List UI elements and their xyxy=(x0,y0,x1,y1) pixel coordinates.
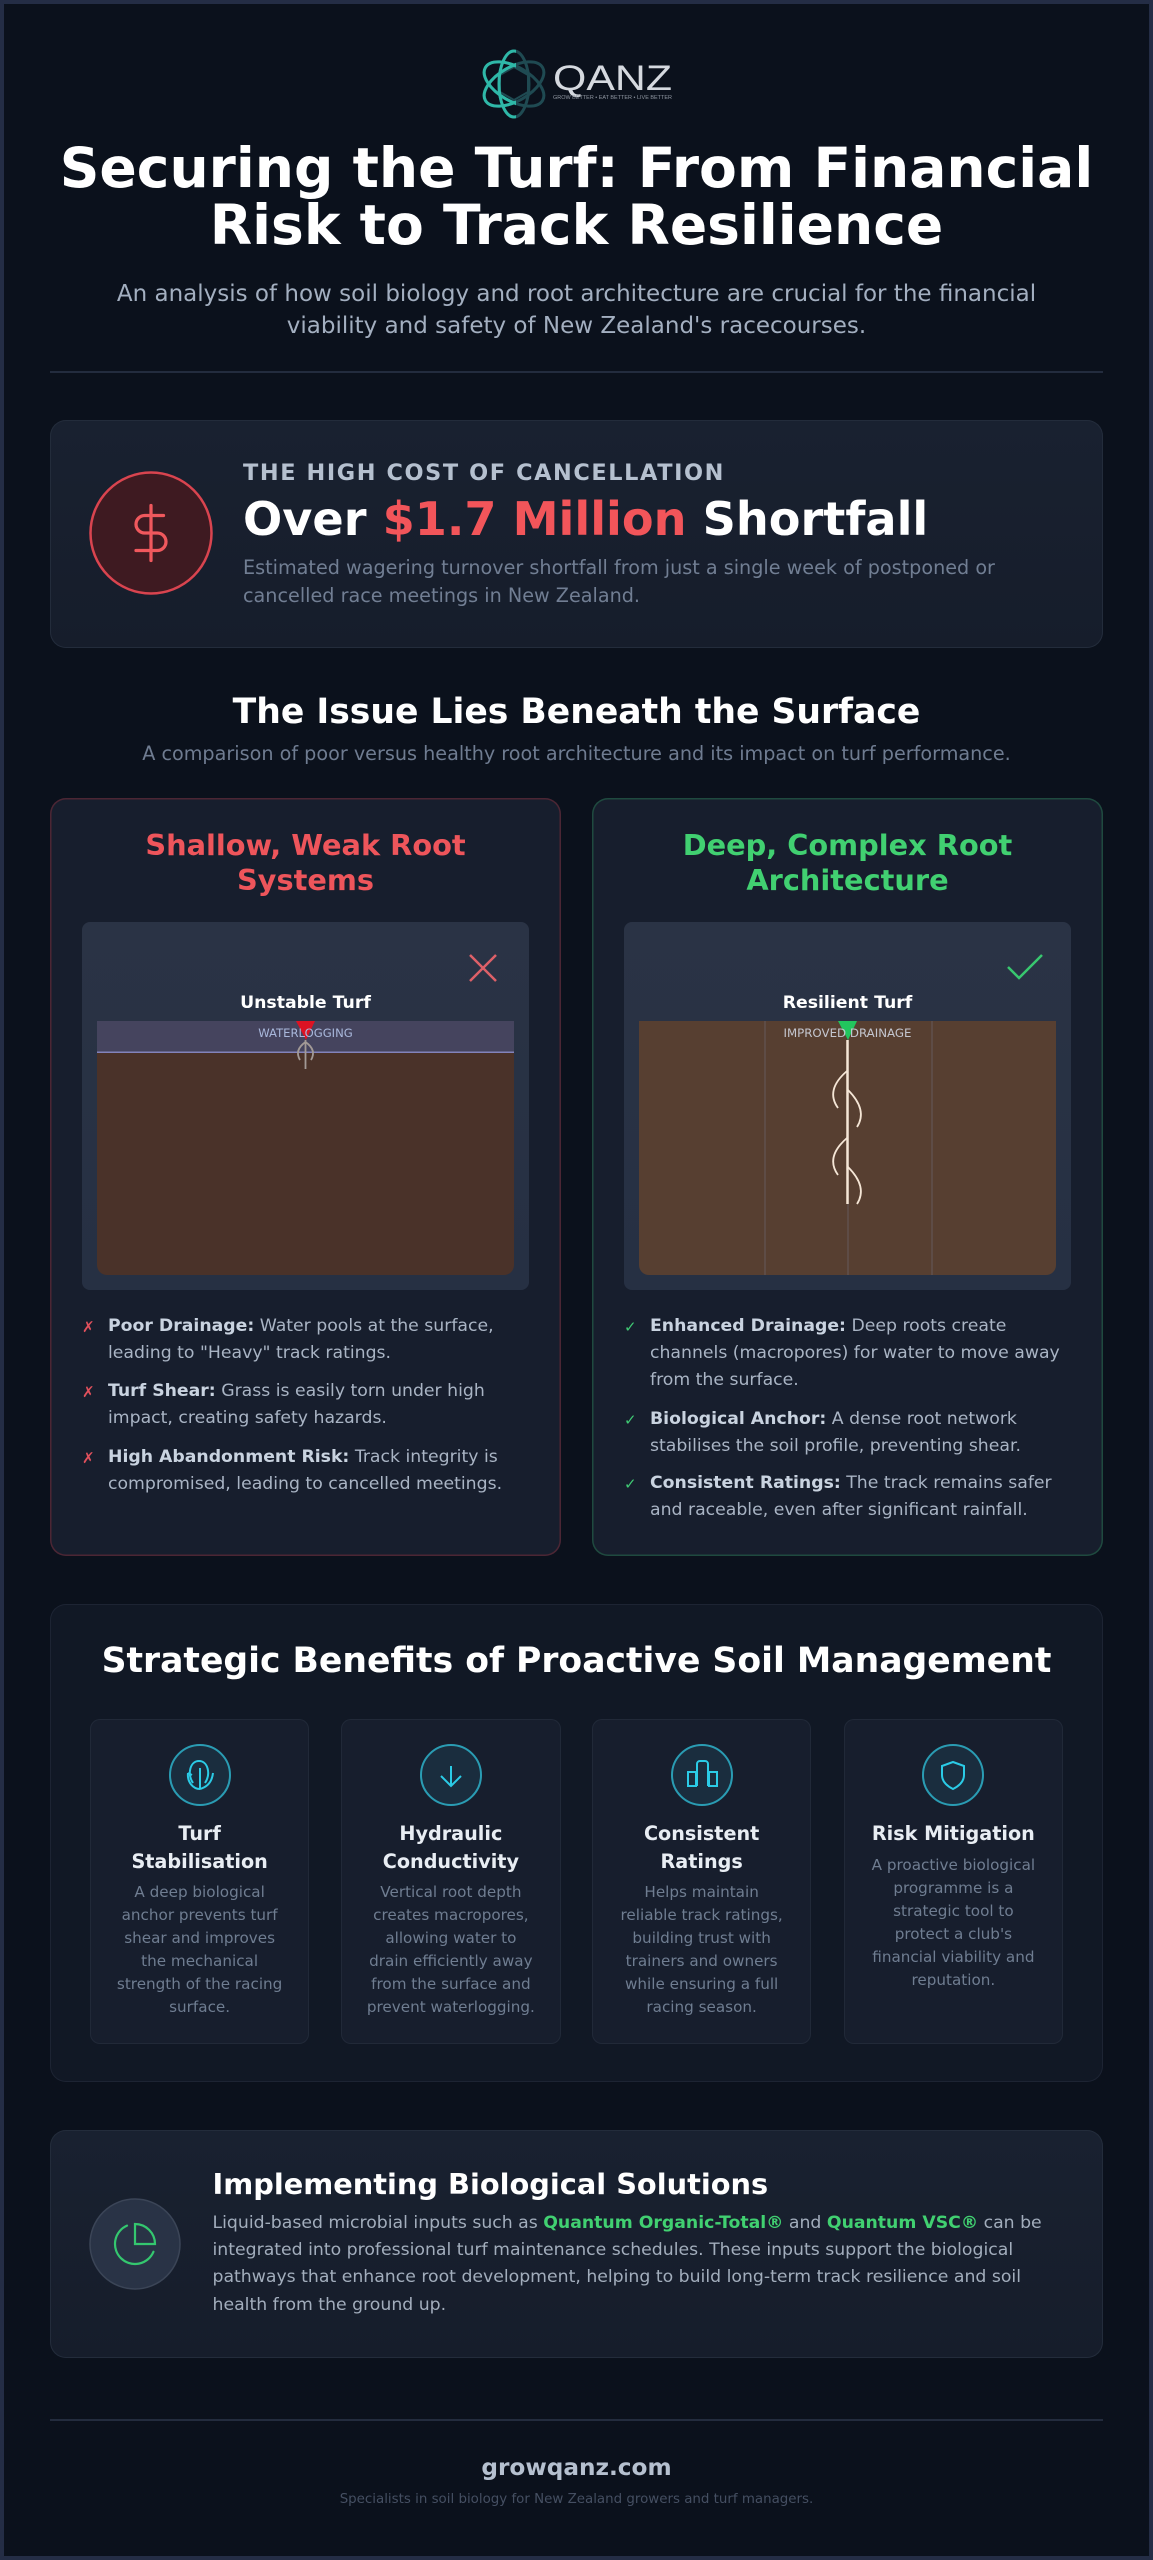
card: hydraulic conductivity xyxy=(341,1719,560,2044)
title xyxy=(60,136,1093,257)
card text: reliable track ratings, xyxy=(620,1906,783,1924)
card text: while ensuring a full xyxy=(625,1975,778,1993)
bullet: turf shear xyxy=(82,1381,485,1428)
card text: shear and improves xyxy=(124,1929,275,1947)
card text: A deep biological xyxy=(134,1883,265,1901)
bullet: abandonment risk: ✗ xyxy=(82,1449,95,1467)
card text: programme is a xyxy=(893,1879,1013,1897)
heading: Implementing Biological Solutions xyxy=(212,2167,768,2201)
card text: anchor prevents turf xyxy=(122,1906,278,1924)
card title: Conductivity xyxy=(383,1850,519,1873)
panel: deep roots xyxy=(592,798,1103,1556)
card text: the mechanical xyxy=(141,1952,258,1970)
card text xyxy=(620,1883,783,2016)
card title: Turf xyxy=(178,1822,221,1845)
card text: protect a club's xyxy=(895,1925,1012,1943)
heading: Architecture xyxy=(746,863,949,897)
panel: strategic benefits xyxy=(50,1604,1103,2082)
card text: creates macropores, xyxy=(373,1906,529,1924)
bullet: poor drainage xyxy=(82,1316,494,1363)
card text: building trust with xyxy=(632,1929,771,1947)
footer note: Specialists in soil biology for New Zealand growers and turf managers. xyxy=(340,2492,813,2507)
card text xyxy=(872,1856,1035,1989)
card text: drain efficiently away xyxy=(369,1952,533,1970)
icon: dollar xyxy=(89,471,213,595)
bullet: enhanced drainage: channels (macropores) for water to move away xyxy=(650,1343,1060,1363)
card text: from the surface and xyxy=(371,1975,531,1993)
card: consistent ratings xyxy=(592,1719,811,2044)
bullet: consistent ratings: ✓ xyxy=(624,1475,637,1493)
bullet: enhanced drainage: from the surface. xyxy=(650,1370,799,1390)
subtitle: viability and safety of New Zealand's racecourses. xyxy=(287,313,866,339)
logo: GROW BETTER • EAT BETTER • LIVE BETTER xyxy=(553,95,672,101)
icon: arrow down xyxy=(420,1744,482,1806)
card title: Stabilisation xyxy=(131,1850,268,1873)
description: Estimated wagering turnover shortfall from just a single week of postponed or xyxy=(243,556,995,579)
stat: shortfall: Over $1.7 Million Shortfall xyxy=(243,492,928,546)
bullet: abandonment risk: compromised, leading to cancelled meetings. xyxy=(108,1474,502,1494)
body text: integrated into professional turf maintenance schedules. These inputs support the biological xyxy=(212,2240,1013,2260)
body text: pathways that enhance root development, helping to build long-term track resilience and soil xyxy=(212,2267,1021,2287)
subtitle: An analysis of how soil biology and root architecture are crucial for the financial xyxy=(117,281,1036,307)
bullet: biological anchor: Biological Anchor: A dense root network xyxy=(650,1409,1017,1429)
heading: Systems xyxy=(237,863,374,897)
heading: Shallow, Weak Root xyxy=(145,828,466,862)
card text: surface. xyxy=(169,1998,230,2016)
panel: cost of cancellation xyxy=(50,420,1103,648)
card text: strategic tool to xyxy=(893,1902,1014,1920)
bullet: enhanced drainage xyxy=(624,1316,1060,1390)
bullet: poor drainage: leading to "Heavy" track ratings. xyxy=(108,1343,391,1363)
label: high cost: THE HIGH COST OF CANCELLATION xyxy=(243,460,725,486)
card text: reputation. xyxy=(912,1971,995,1989)
card text: Vertical root depth xyxy=(380,1883,521,1901)
footer site: growqanz.com xyxy=(481,2454,672,2481)
card text xyxy=(367,1883,535,2016)
body text: health from the ground up. xyxy=(212,2295,446,2315)
card text: strength of the racing xyxy=(117,1975,282,1993)
diagram: resilient turf xyxy=(624,922,1071,1290)
bullet: turf shear: impact, creating safety hazards. xyxy=(108,1408,387,1428)
section subheading: A comparison of poor versus healthy root architecture and its impact on turf performance. xyxy=(142,742,1011,765)
title: Risk to Track Resilience xyxy=(210,193,943,257)
logo xyxy=(482,50,672,118)
card text: prevent waterlogging. xyxy=(367,1998,535,2016)
diagram: unstable turf xyxy=(82,922,529,1290)
diagram: unstable turf: WATERLOGGING xyxy=(258,1026,353,1040)
card text: A proactive biological xyxy=(872,1856,1035,1874)
title: Securing the Turf: From Financial xyxy=(60,136,1093,200)
section heading: The Issue Lies Beneath the Surface xyxy=(233,692,920,732)
card text: allowing water to xyxy=(385,1929,516,1947)
bullet: consistent ratings xyxy=(624,1473,1052,1520)
description: cancelled race meetings in New Zealand. xyxy=(243,584,640,607)
bullet: turf shear: ✗ xyxy=(82,1383,95,1401)
heading: Strategic Benefits of Proactive Soil Management xyxy=(102,1641,1051,1681)
bullet: abandonment risk xyxy=(82,1447,502,1494)
card text: racing season. xyxy=(646,1998,757,2016)
card title xyxy=(644,1822,759,1873)
card title xyxy=(131,1822,268,1873)
bullet: poor drainage: ✗ xyxy=(82,1318,95,1336)
card title: Consistent xyxy=(644,1822,759,1845)
card text: Helps maintain xyxy=(644,1883,759,1901)
icon: shield xyxy=(922,1744,984,1806)
body text xyxy=(212,2213,1042,2315)
diagram: resilient turf: Resilient Turf xyxy=(783,993,913,1013)
icon: bars xyxy=(671,1744,733,1806)
card text: trainers and owners xyxy=(626,1952,778,1970)
icon: pie chart xyxy=(89,2198,181,2290)
card: turf stabilisation xyxy=(90,1719,309,2044)
card text: financial viability and xyxy=(872,1948,1034,1966)
heading xyxy=(683,828,1012,897)
description xyxy=(243,556,995,607)
subtitle xyxy=(117,281,1036,339)
card: risk mitigation xyxy=(844,1719,1063,2044)
card title xyxy=(383,1822,519,1873)
panel: shallow roots xyxy=(50,798,561,1556)
card title: Risk Mitigation xyxy=(872,1822,1035,1845)
bullet: abandonment risk: High Abandonment Risk: Track integrity is xyxy=(108,1447,498,1467)
bullet: enhanced drainage: ✓ xyxy=(624,1318,637,1336)
bullet: biological anchor: stabilises the soil profile, preventing shear. xyxy=(650,1436,1021,1456)
heading: Deep, Complex Root xyxy=(683,828,1012,862)
bullet: biological anchor: ✓ xyxy=(624,1411,637,1429)
panel: implementing solutions xyxy=(50,2130,1103,2358)
heading xyxy=(145,828,466,897)
card title: Hydraulic xyxy=(399,1822,502,1845)
diagram: resilient turf: IMPROVED DRAINAGE xyxy=(783,1026,912,1040)
diagram: unstable turf: Unstable Turf xyxy=(240,993,371,1013)
card text xyxy=(117,1883,282,2016)
card title: Ratings xyxy=(660,1850,743,1873)
logo: QANZ xyxy=(553,59,672,98)
bullet: consistent ratings: Consistent Ratings: The track remains safer xyxy=(650,1473,1052,1493)
body text: Liquid-based microbial inputs such as Quantum Organic-Total® and Quantum VSC® can be xyxy=(212,2213,1042,2233)
bullet: consistent ratings: and raceable, even after significant rainfall. xyxy=(650,1500,1028,1520)
icon: leaf xyxy=(169,1744,231,1806)
bullet: biological anchor xyxy=(624,1409,1021,1456)
bullet: enhanced drainage: Enhanced Drainage: Deep roots create xyxy=(650,1316,1006,1336)
bullet: poor drainage: Poor Drainage: Water pools at the surface, xyxy=(108,1316,494,1336)
bullet: turf shear: Turf Shear: Grass is easily torn under high xyxy=(108,1381,485,1401)
